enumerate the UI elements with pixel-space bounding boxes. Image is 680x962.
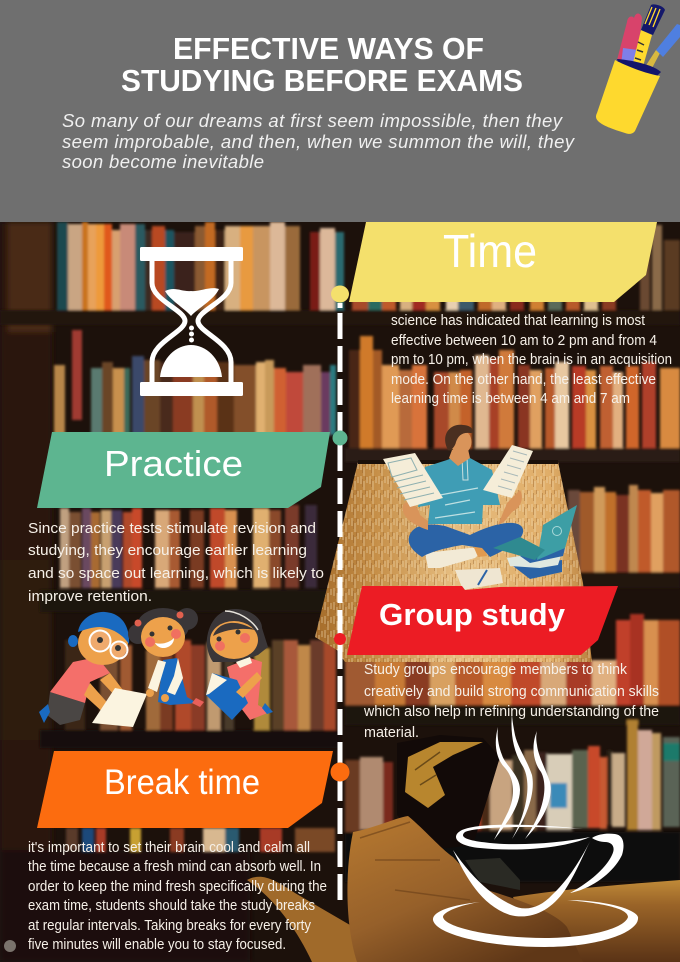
dark lamp base and sofa <box>4 735 680 962</box>
text: practice <box>28 521 324 605</box>
panel: time banner: Time <box>443 225 537 277</box>
panel: break time banner <box>37 751 333 828</box>
text: time: learning time is between 4 am and 7 am <box>391 391 630 407</box>
panel: time banner <box>349 222 657 302</box>
text: time <box>391 313 672 407</box>
icon: coffee cup with steam <box>433 713 638 947</box>
illustration: student with papers and laptop <box>383 425 577 590</box>
quote subtitle: So many of our dreams at first seem impossible, then they <box>62 110 564 131</box>
text: practice: Since practice tests stimulate revision and <box>28 521 316 537</box>
text: break time: it's important to set their brain cool and calm all <box>28 840 310 856</box>
child three <box>206 609 273 720</box>
icon: hourglass <box>140 247 243 396</box>
icon: pen holder <box>596 4 680 134</box>
text: group study: which also help in refining understanding of the <box>363 704 659 720</box>
text: time: science has indicated that learning is most <box>391 313 645 329</box>
text: break time: the time because a fresh mind can absorb well. In <box>28 859 321 875</box>
panel: practice banner: Practice <box>104 443 243 484</box>
text: group study: Study groups encourage members to think <box>364 662 628 678</box>
text: group study: material. <box>364 725 419 741</box>
row 3 <box>568 490 580 572</box>
text: time: mode. On the other hand, the least effective <box>391 372 656 388</box>
quote subtitle: soon become inevitable <box>62 151 264 172</box>
row 5 <box>345 760 360 833</box>
text: practice: studying, they encourage earlier learning <box>28 543 307 559</box>
text: break time: at regular intervals. Taking breaks for every forty <box>28 918 312 934</box>
quote subtitle <box>62 110 576 172</box>
text: group study <box>363 662 659 741</box>
row 4 <box>65 640 85 730</box>
row 1 <box>57 222 68 310</box>
timeline <box>330 286 350 902</box>
dot: break time <box>330 762 350 782</box>
panel: break time banner: Break time <box>104 763 260 802</box>
text: practice: and so space out learning, which is likely to <box>28 566 324 582</box>
header band <box>0 0 680 222</box>
title: EFFECTIVE WAYS OF <box>173 31 484 66</box>
quote subtitle: seem improbable, and then, when we summon the will, they <box>62 131 576 152</box>
dot: time <box>331 286 349 302</box>
panel: practice banner <box>37 432 330 508</box>
illustration: three children reading <box>39 608 273 727</box>
title <box>121 31 523 98</box>
text: group study: creatively and build strong communication skills <box>364 684 659 700</box>
lamp shade <box>315 462 592 662</box>
child one <box>39 612 147 727</box>
title: STUDYING BEFORE EXAMS <box>121 63 523 98</box>
dashed line <box>338 303 342 902</box>
text: time: effective between 10 am to 2 pm and from 4 <box>391 333 657 349</box>
text: break time: order to keep the mind fresh specifically during the <box>28 879 327 895</box>
row 2 <box>54 365 65 435</box>
dot: group study <box>334 633 346 645</box>
text: break time: five minutes will enable you to stay focused. <box>28 937 286 953</box>
panel: group study banner <box>347 586 618 655</box>
text: break time: exam time, students should take the study breaks <box>28 898 315 914</box>
background: bookshelf photo <box>0 222 680 962</box>
panel: group study banner: Group study <box>379 597 566 632</box>
dot: practice <box>332 430 348 446</box>
child two <box>128 608 204 707</box>
text: practice: improve retention. <box>28 589 152 605</box>
text: break time <box>28 840 327 953</box>
